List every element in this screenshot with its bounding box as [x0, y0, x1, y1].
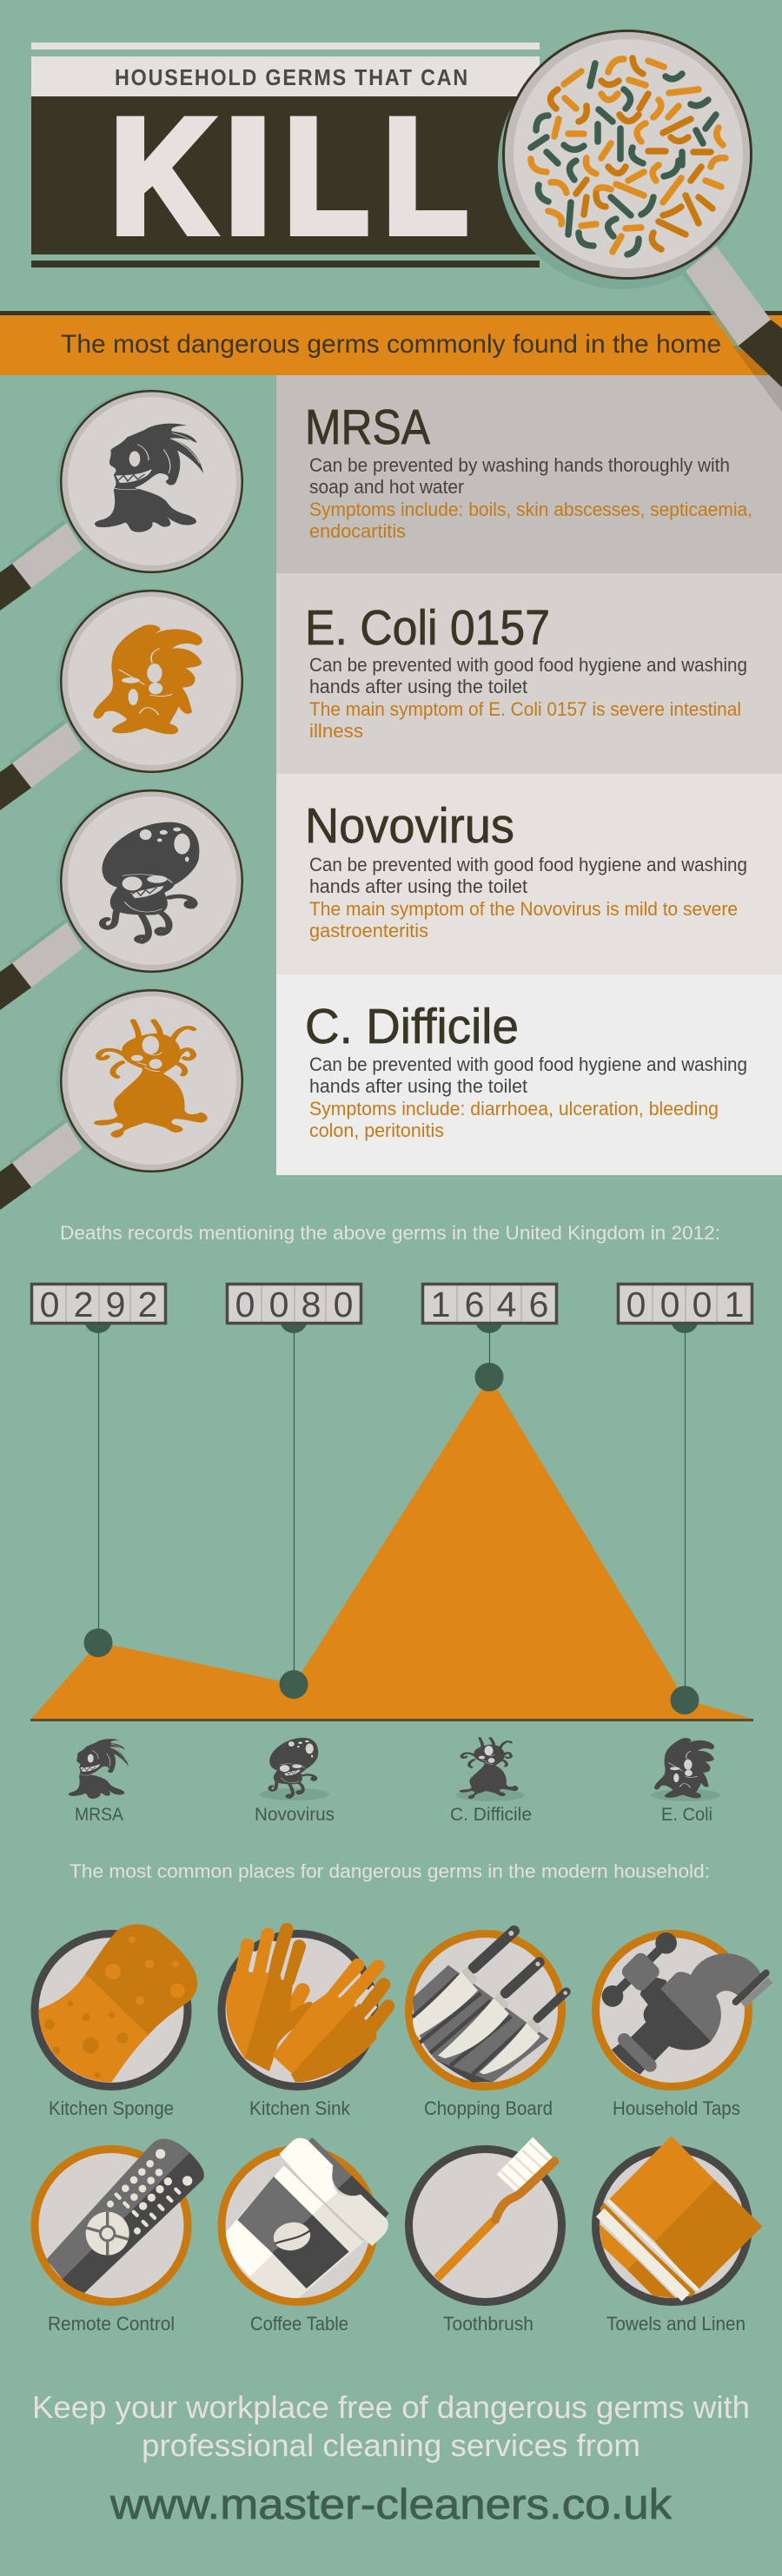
- label: household taps: Household Taps: [613, 2097, 740, 2119]
- label: remote control: Remote Control: [48, 2313, 175, 2335]
- data column: c. difficile: 4: [497, 1285, 516, 1324]
- description: mrsa: [309, 454, 752, 542]
- label: towels and linen: Towels and Linen: [606, 2313, 746, 2335]
- description: c. difficile: [309, 1054, 747, 1141]
- data column: c. difficile: 6: [529, 1285, 548, 1324]
- legend item: mrsa: [69, 1739, 129, 1825]
- heading: c. difficile: C. Difficile: [305, 999, 519, 1054]
- title word: kill: K: [110, 84, 215, 268]
- panel: c. difficile background: [276, 974, 782, 1175]
- data column: novovirus: 0: [334, 1285, 353, 1324]
- panel: mrsa background: [276, 375, 782, 573]
- heading: most common places: The most common places for dangerous germs in the modern household:: [70, 1860, 710, 1882]
- description: e. coli: hands after using the toilet: [309, 676, 527, 697]
- title word: kill: L: [383, 84, 468, 267]
- label: chopping board: Chopping Board: [424, 2097, 553, 2119]
- germ character: e. coli: [93, 624, 202, 734]
- germ row: novovirus: [0, 789, 747, 1010]
- magnifier: novovirus: [0, 789, 243, 1010]
- legend item: e. coli: [651, 1738, 720, 1825]
- description: c. difficile: Symptoms include: diarrhoea, ulceration, bleeding: [309, 1098, 719, 1120]
- title word: kill: [110, 84, 468, 268]
- germ row: c. difficile: [0, 988, 747, 1210]
- towel stripes: [600, 2203, 696, 2297]
- icon: kitchen sponge: [35, 1925, 197, 2086]
- cup sleeve: [237, 2176, 312, 2253]
- valve handle: [655, 1932, 677, 1954]
- bacteria cluster: [531, 58, 726, 254]
- legend item: mrsa: MRSA: [75, 1805, 123, 1825]
- description: mrsa: Symptoms include: boils, skin abscesses, septicaemia,: [309, 499, 752, 520]
- data column: c. difficile: 6: [465, 1285, 484, 1324]
- lid back: [308, 2137, 352, 2189]
- icon: household taps: [596, 1932, 771, 2086]
- subheading text: The most dangerous germs commonly found in the home: [61, 330, 721, 359]
- label: kitchen sink: Kitchen Sink: [249, 2097, 351, 2119]
- data column: novovirus: 0: [235, 1285, 255, 1324]
- icon: toothbrush: [408, 2137, 561, 2302]
- icon: chopping board knives: [408, 1931, 567, 2086]
- description: e. coli: The main symptom of E. Coli 0157 is severe intestinal: [309, 698, 741, 720]
- coffee bean: [271, 2220, 313, 2253]
- description: mrsa: Can be prevented by washing hands thoroughly with: [309, 454, 730, 476]
- data column: mrsa: 0: [40, 1285, 59, 1324]
- d-pad: [86, 2212, 129, 2256]
- description: novovirus: gastroenteritis: [309, 920, 428, 941]
- icon: remote control: [35, 2139, 204, 2302]
- legend item: c. difficile: [450, 1738, 532, 1825]
- germ character: mrsa: [95, 424, 203, 532]
- data column: e. coli: [619, 1284, 752, 1714]
- description: e. coli: [309, 654, 747, 742]
- data column: novovirus: 0: [269, 1285, 288, 1324]
- data column: novovirus: [228, 1284, 361, 1699]
- base collar: [612, 2043, 646, 2075]
- call to action: professional cleaning services from: [142, 2427, 640, 2463]
- description: novovirus: Can be prevented with good food hygiene and washing: [309, 854, 747, 875]
- call to action: [32, 2389, 750, 2528]
- chart baseline: [30, 1719, 753, 1721]
- title word: kill: I: [224, 85, 272, 267]
- call to action: Keep your workplace free of dangerous germs with: [32, 2389, 750, 2425]
- pipe body: [660, 1953, 762, 2041]
- title banner: [31, 43, 540, 268]
- heading: mrsa: MRSA: [305, 400, 430, 455]
- description: novovirus: The main symptom of the Novovirus is mild to severe: [309, 898, 738, 920]
- data column: e. coli: 0: [693, 1285, 712, 1324]
- description: c. difficile: colon, peritonitis: [309, 1120, 444, 1141]
- legend item: e. coli: E. Coli: [661, 1805, 712, 1825]
- germ description panels: [276, 375, 782, 1175]
- remote buttons: [107, 2149, 192, 2235]
- description: e. coli: illness: [309, 720, 363, 742]
- legend item: novovirus: Novovirus: [255, 1805, 335, 1825]
- data column: c. difficile: [422, 1284, 556, 1391]
- germ row: mrsa: [0, 389, 752, 611]
- data column: mrsa: 2: [74, 1285, 93, 1324]
- heading: deaths records: Deaths records mentioning the above germs in the United Kingdom in 2012:: [60, 1222, 720, 1244]
- legend item: novovirus: [255, 1738, 335, 1825]
- magnifier: e. coli: [0, 589, 243, 810]
- data column: e. coli: 0: [626, 1285, 646, 1324]
- website url: www.master-cleaners.co.uk: [109, 2481, 673, 2528]
- orange subheading band: [0, 311, 782, 375]
- knife handles: [474, 1931, 567, 2018]
- data column: e. coli: 1: [725, 1285, 744, 1324]
- chart legend: [69, 1738, 720, 1825]
- data column: novovirus: 8: [302, 1285, 321, 1324]
- cup body: [249, 2204, 363, 2298]
- description: mrsa: endocartitis: [309, 520, 406, 542]
- orange area: [31, 1377, 752, 1719]
- data column: e. coli: 0: [660, 1285, 679, 1324]
- label: coffee table: Coffee Table: [250, 2313, 348, 2335]
- germ character: c. difficile: [94, 1020, 208, 1138]
- data column: mrsa: [31, 1284, 165, 1657]
- description: c. difficile: hands after using the toilet: [309, 1075, 527, 1097]
- panel: novovirus background: [276, 774, 782, 974]
- magnifying glass: hero: [498, 30, 782, 413]
- title word: kill: L: [284, 84, 369, 267]
- heading: novovirus: Novovirus: [305, 798, 514, 854]
- folded towel: [610, 2136, 715, 2242]
- knife blades: [413, 1972, 540, 2074]
- data column: mrsa: 9: [106, 1285, 125, 1324]
- spout end: [743, 1980, 771, 2005]
- description: novovirus: hands after using the toilet: [309, 875, 527, 897]
- germ row: e. coli: [0, 589, 747, 810]
- magnifier: mrsa: [0, 389, 243, 611]
- germ character: novovirus: [103, 822, 199, 941]
- title line: household germs that can: HOUSEHOLD GERMS THAT CAN: [115, 64, 469, 90]
- description: c. difficile: Can be prevented with good food hygiene and washing: [309, 1054, 747, 1075]
- icon: coffee table cup: [222, 2137, 389, 2302]
- bristles: [497, 2137, 553, 2192]
- description: novovirus: [309, 854, 747, 941]
- area chart: deaths by germ: [30, 1284, 753, 1721]
- description: mrsa: soap and hot water: [309, 476, 464, 498]
- magnifier: c. difficile: [0, 988, 243, 1210]
- icon: kitchen sink gloves: [222, 1930, 388, 2086]
- board: [413, 1965, 549, 2082]
- icon: towels and linen: [596, 2136, 762, 2302]
- panel: e. coli background: [276, 573, 782, 774]
- lid: [280, 2138, 337, 2204]
- description: e. coli: Can be prevented with good food hygiene and washing: [309, 654, 747, 676]
- legend item: c. difficile: C. Difficile: [450, 1805, 532, 1825]
- heading: e. coli 0157: E. Coli 0157: [305, 600, 550, 656]
- label: kitchen sponge: Kitchen Sponge: [49, 2097, 174, 2119]
- data column: c. difficile: 1: [431, 1285, 450, 1324]
- label: toothbrush: Toothbrush: [443, 2313, 533, 2335]
- data column: mrsa: 2: [138, 1285, 157, 1324]
